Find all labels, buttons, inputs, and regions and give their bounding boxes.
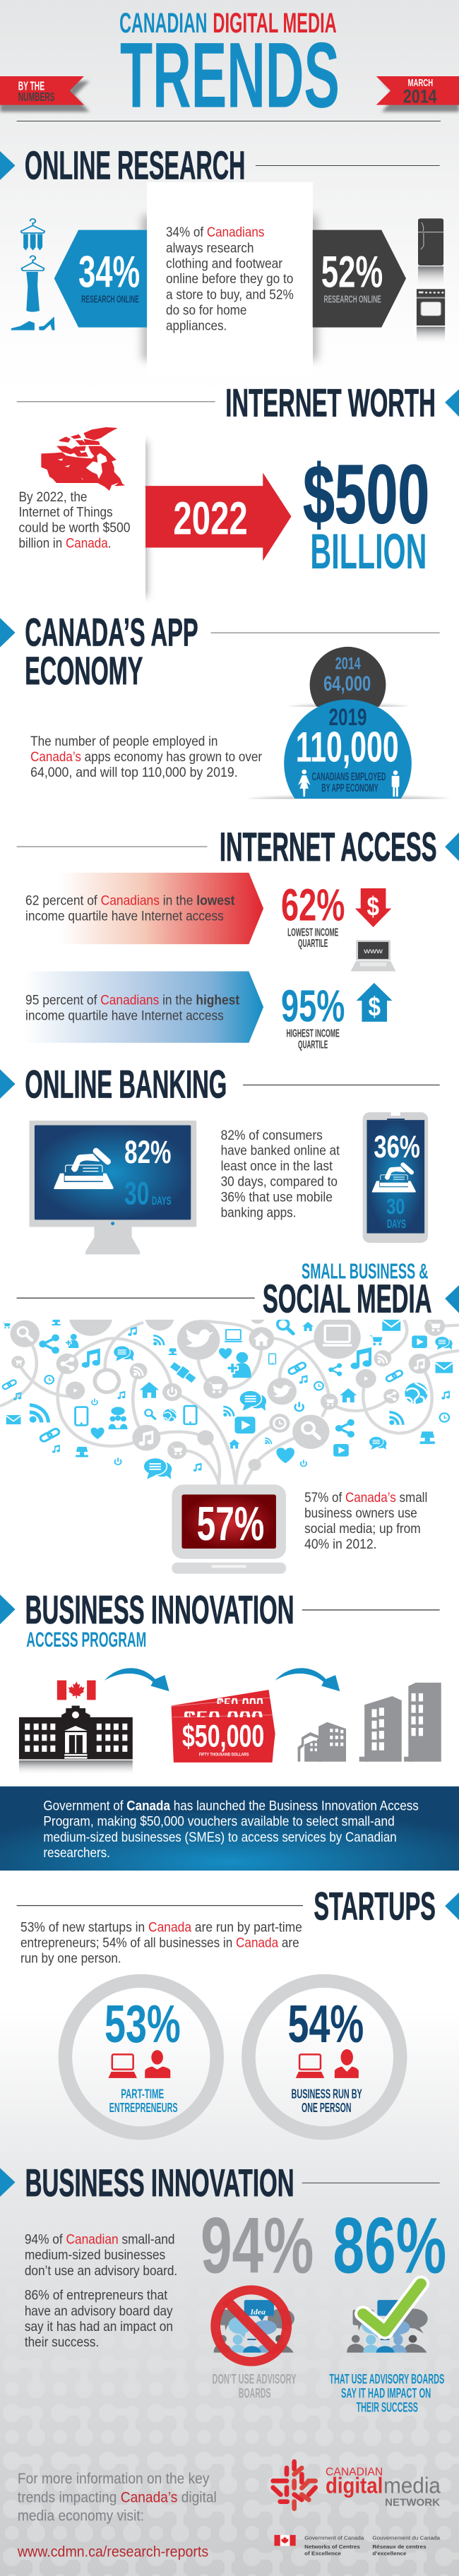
government of canada signature: Gouvernement du Canada [372, 2535, 441, 2541]
2019 circle: 110,000 [296, 723, 399, 770]
icon: government building with flag [19, 1681, 133, 1775]
caption: use advisory boards [329, 2372, 444, 2415]
icon: up arrow [357, 983, 393, 1022]
shadow of internet worth panel [140, 441, 145, 597]
app economy text [30, 734, 262, 780]
right ribbon [376, 76, 459, 112]
icon: vouchers: FIFTY THOUSAND DOLLARS [199, 1753, 249, 1758]
research text: online before they go to [166, 270, 293, 286]
blue banner: medium-sized businesses (SMEs) to access services by Canadian [43, 1830, 397, 1845]
smartphone: 36% [374, 1128, 420, 1164]
research text: appliances. [166, 318, 227, 333]
95 percent stat: QUARTILE [298, 1039, 328, 1051]
small business and social media section [0, 1259, 459, 1691]
network curves [0, 1320, 459, 1484]
advisory text: 94% of Canadian small-and [25, 2232, 174, 2247]
94 percent stat: 94% [201, 2201, 314, 2290]
government of canada signature: Networks of Centres [304, 2544, 360, 2550]
heading: online banking: ONLINE BANKING [25, 1062, 227, 1107]
footer call to action: www.cdmn.ca/research-reports [17, 2543, 208, 2560]
laptop 57 percent [172, 1484, 286, 1574]
research text: 34% of Canadians [166, 224, 264, 239]
caption: don't use advisory boards [213, 2372, 297, 2401]
dark stat hexagon: 52% [321, 247, 383, 297]
internet worth and app economy sections [0, 381, 459, 827]
logo: canadian digital media network wordmark: NETWORK [385, 2497, 440, 2509]
left ribbon [0, 76, 89, 112]
left ribbon: BY THE [18, 79, 44, 93]
curved arrow one [105, 1668, 169, 1691]
ring: part-time entrepreneurs: ENTREPRENEURS [109, 2101, 178, 2116]
ring: business run by one person: 54% [288, 1994, 364, 2054]
ring: business run by one person [249, 1981, 400, 2133]
2014 circle: 2014 [335, 655, 361, 673]
heading: internet access [17, 825, 459, 870]
heading: app economy: CANADA’S APP [25, 610, 198, 654]
logo: maple leaf of dots [273, 2462, 316, 2509]
smartphone: DAYS [387, 1217, 406, 1231]
business innovation and footer [0, 2161, 446, 2560]
app economy text: Canada’s apps economy has grown to over [30, 749, 262, 765]
lowest quartile band [23, 873, 263, 944]
startups text [20, 1920, 302, 1967]
banking text: banking apps. [221, 1205, 297, 1221]
internet access and online banking sections [0, 825, 459, 1254]
node glyphs [14, 1322, 441, 1455]
ring: part-time entrepreneurs [65, 1981, 217, 2133]
heading: internet worth [17, 381, 459, 424]
lowest quartile band: income quartile have Internet access [25, 909, 224, 924]
icon: vouchers [172, 1690, 275, 1763]
research text: do so for home [166, 302, 246, 318]
government of canada signature: of Excellence [304, 2551, 342, 2556]
62 percent stat [281, 880, 345, 950]
footer call to action: For more information on the key [18, 2470, 210, 2487]
curved arrow two [275, 1668, 340, 1691]
advisory text: say it has had an impact on [25, 2320, 173, 2334]
icon: stove [417, 289, 445, 345]
95 percent stat [281, 981, 345, 1051]
map of Canada [41, 427, 125, 491]
startups text: entrepreneurs; 54% of all businesses in Canada are [20, 1936, 299, 1951]
startups text: 53% of new startups in Canada are run by part-time [20, 1920, 302, 1935]
app economy text: 64,000, and will top 110,000 by 2019. [30, 765, 238, 780]
icon: clothing [11, 219, 55, 330]
desktop monitor: 30 [124, 1175, 149, 1212]
banking text [221, 1128, 340, 1221]
ring: part-time entrepreneurs: 53% [105, 1994, 181, 2054]
blue banner: Government of Canada has launched the Business Innovation Access [43, 1798, 419, 1813]
icon: crowd with check mark [347, 2284, 428, 2353]
62 percent stat: LOWEST INCOME [287, 926, 338, 938]
icon: up arrow: $ [369, 993, 381, 1022]
research text: a store to buy, and 52% [166, 287, 294, 302]
logo: canadian digital media network wordmark: digital [326, 2473, 383, 2498]
footer call to action [17, 2470, 217, 2560]
smartphone: 30 [386, 1193, 405, 1219]
blue stat hexagon [54, 230, 147, 328]
government of canada signature: Réseaux de centres [372, 2544, 427, 2550]
logo: canadian digital media network wordmark: media [383, 2473, 441, 2498]
heading: app economy: ECONOMY [25, 648, 143, 693]
app economy text: The number of people employed in [30, 734, 217, 749]
banking text: 36% that use mobile [221, 1190, 333, 1205]
title line: CANADIAN [119, 7, 208, 39]
desktop monitor: 82% [124, 1133, 172, 1170]
government of canada signature: Government of Canada [304, 2535, 364, 2541]
header and online research section [0, 7, 459, 345]
2014 circle: 64,000 [323, 672, 371, 696]
white research panel [147, 182, 313, 376]
icon: laptop and woman [296, 2049, 359, 2078]
highest quartile band [23, 972, 263, 1043]
advisory text: their success. [25, 2335, 99, 2350]
logo: canadian digital media network wordmark [326, 2466, 441, 2509]
footer call to action: media economy visit: [18, 2507, 144, 2524]
icon: vouchers: $50,000 [184, 1703, 263, 1736]
laptop 57 percent: 57% [197, 1497, 264, 1551]
research text: clothing and footwear [166, 256, 283, 271]
internet worth text: Internet of Things [19, 505, 113, 520]
ring: business run by one person: ONE PERSON [302, 2101, 351, 2116]
lowest quartile band: 62 percent of Canadians in the lowest [25, 893, 235, 909]
blue banner: researchers. [43, 1845, 110, 1861]
internet worth text: By 2022, the [19, 489, 88, 505]
advisory text: have an advisory board day [25, 2303, 173, 2319]
banking text: 30 days, compared to [221, 1174, 338, 1190]
icon: laptop www: www [363, 948, 383, 955]
icon: office buildings [298, 1683, 441, 1762]
ring: part-time entrepreneurs: PART-TIME [121, 2087, 164, 2101]
highest quartile band: 95 percent of Canadians in the highest [25, 993, 239, 1008]
icon: crowd with prohibition sign: Idea [249, 2309, 266, 2317]
icon: vouchers: $50,000 [182, 1719, 264, 1753]
95 percent stat: 95% [281, 981, 345, 1031]
icon: down arrow: $ [366, 893, 379, 922]
social media text: social media; up from [304, 1522, 421, 1537]
heading: business innovation access program: ACCESS PROGRAM [26, 1628, 146, 1652]
right ribbon: 2014 [403, 87, 437, 107]
icon: crowd with prohibition sign [214, 2290, 294, 2361]
$500 billion [303, 448, 429, 579]
footer call to action: trends impacting Canada’s digital [18, 2488, 217, 2505]
dark stat hexagon [313, 230, 406, 328]
shadow of research panel [142, 215, 318, 360]
banking text: 82% of consumers [221, 1128, 323, 1143]
blue stat hexagon: RESEARCH ONLINE [81, 293, 139, 305]
logo: canadian digital media network wordmark: CANADIAN [326, 2466, 383, 2478]
research text: always research [166, 240, 254, 256]
internet worth text [19, 489, 130, 551]
62 percent stat: 62% [281, 880, 345, 931]
dark stat hexagon: RESEARCH ONLINE [324, 293, 381, 305]
social media text: 40% in 2012. [304, 1537, 377, 1552]
2019 circle [249, 699, 448, 799]
left ribbon: NUMBERS [18, 90, 55, 104]
gray nodes [10, 1319, 445, 1471]
advisory text: don’t use an advisory board. [25, 2263, 177, 2279]
caption: don't use advisory boards: DON’T USE ADVISORY [213, 2372, 297, 2387]
smartphone [363, 1112, 428, 1243]
heading: business innovation access program [0, 1587, 440, 1652]
heading: app economy [0, 610, 440, 693]
right ribbon: MARCH [407, 78, 433, 89]
social media text: 57% of Canada’s small [304, 1491, 427, 1505]
desktop monitor [29, 1121, 196, 1254]
icon: laptop and man [108, 2050, 170, 2078]
startups text: run by one person. [20, 1951, 121, 1967]
banking text: least once in the last [221, 1159, 333, 1174]
highest quartile band: income quartile have Internet access [25, 1008, 224, 1023]
icon: laptop www [351, 940, 395, 972]
desktop monitor: DAYS [152, 1195, 172, 1208]
research text [166, 224, 294, 333]
icon: vouchers: $50,000 [217, 1691, 263, 1721]
social media text: business owners use [304, 1506, 417, 1521]
62 percent stat: QUARTILE [298, 938, 328, 950]
2014 circle [288, 647, 408, 723]
icon: fridge [418, 218, 443, 287]
icon: payment terminal small [372, 1164, 416, 1193]
advisory text: 86% of entrepreneurs that [25, 2288, 168, 2303]
cyan icons [2, 1318, 453, 1479]
advisory text: medium-sized businesses [25, 2248, 165, 2263]
internet worth text: billion in Canada. [19, 536, 112, 551]
blue stat hexagon: 34% [78, 247, 140, 297]
95 percent stat: HIGHEST INCOME [286, 1028, 340, 1040]
access program graphics, startups section [0, 1681, 459, 2133]
icon: payment terminal [54, 1151, 114, 1189]
government of canada signature [274, 2535, 441, 2556]
icon: woman [298, 770, 310, 797]
heading: social media [17, 1259, 459, 1321]
blue banner [0, 1787, 459, 1871]
red arrow 2022: 2022 [173, 493, 248, 545]
2019 circle: 2019 [329, 704, 366, 731]
heading: startups [17, 1884, 459, 1928]
banking text: have banked online at [221, 1143, 340, 1158]
icon: man [392, 770, 399, 797]
government of canada signature: d’excellence [372, 2551, 407, 2556]
bottom blob pattern [3, 2440, 459, 2576]
internet worth text: could be worth $500 [19, 520, 130, 535]
2019 circle: BY APP ECONOMY [321, 782, 378, 794]
social network tree [0, 1319, 459, 1484]
2019 circle: CANADIANS EMPLOYED [312, 771, 386, 783]
social media text [304, 1491, 427, 1552]
ring: business run by one person: BUSINESS RUN BY [291, 2087, 362, 2101]
blue banner: Program, making $50,000 vouchers available to select small-and [43, 1814, 395, 1830]
icon: down arrow [355, 888, 391, 927]
caption: don't use advisory boards: BOARDS [239, 2386, 270, 2401]
red arrow 2022 [145, 472, 291, 561]
advisory text [25, 2232, 177, 2350]
